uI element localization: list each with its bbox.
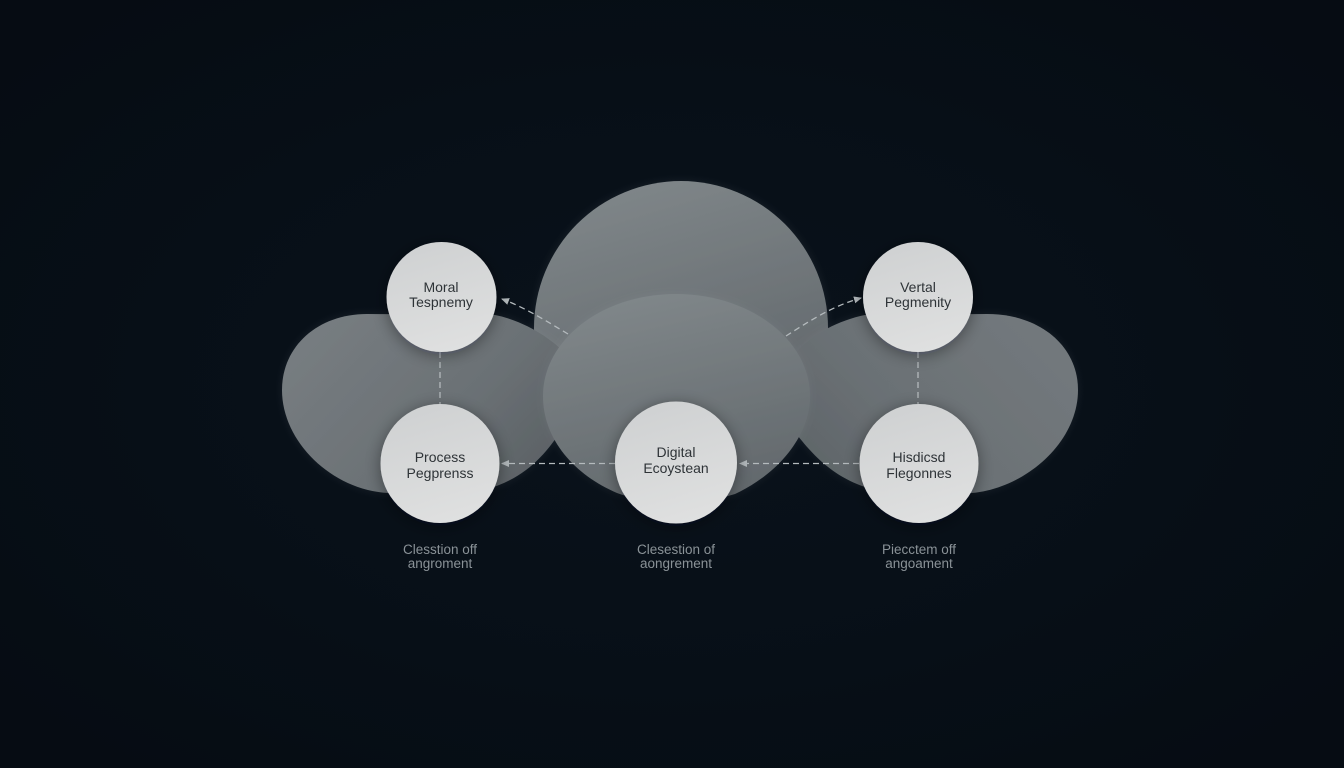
caption: centre — [637, 542, 715, 571]
caption: centre: aongrement — [640, 556, 712, 571]
caption: right: Piecctem off — [882, 542, 956, 557]
arrow: Hisdised to Digital — [740, 462, 859, 464]
caption: left: Clesstion off — [403, 542, 477, 557]
connector: Moral to Process — [439, 352, 441, 404]
node: Process Pegprenss: Pegprenss — [407, 465, 473, 481]
node: Process Pegprenss: Process — [415, 449, 465, 465]
panel: left blob — [282, 314, 562, 493]
connector: Vertal to Hisdised — [917, 352, 919, 404]
arrow: Digital to Process — [502, 462, 615, 464]
node: Moral Tespnemy — [386, 242, 496, 352]
node: Vertal Pegmenity: Vertal — [900, 279, 936, 295]
node: Vertal Pegmenity — [863, 242, 973, 352]
arrow: centre to Moral node — [502, 299, 568, 334]
panel: right blob — [796, 314, 1078, 493]
node: Digital Ecosystean — [615, 402, 737, 524]
node: Hisdised Flegonnes: Flegonnes — [886, 465, 952, 481]
node: Vertal Pegmenity: Pegmenity — [885, 294, 951, 310]
node: Moral Tespnemy: Tespnemy — [409, 294, 473, 310]
panel: front central shape — [543, 294, 810, 502]
node: Moral Tespnemy: Moral — [423, 279, 459, 295]
panel: back circle — [534, 181, 828, 475]
arrow: centre to Vertal node — [786, 298, 861, 336]
node: Hisdised Flegonnes: Hisdicsd — [893, 449, 945, 465]
caption: left — [403, 542, 477, 571]
caption: left: angroment — [408, 556, 473, 571]
caption: right — [882, 542, 956, 571]
caption: centre: Clesestion of — [637, 542, 715, 557]
node: Digital Ecosystean: Ecoystean — [643, 460, 709, 476]
node: Hisdised Flegonnes — [860, 404, 978, 523]
node: Digital Ecosystean: Digital — [657, 444, 695, 460]
node: Process Pegprenss — [380, 404, 500, 523]
caption: right: angoament — [885, 556, 953, 571]
